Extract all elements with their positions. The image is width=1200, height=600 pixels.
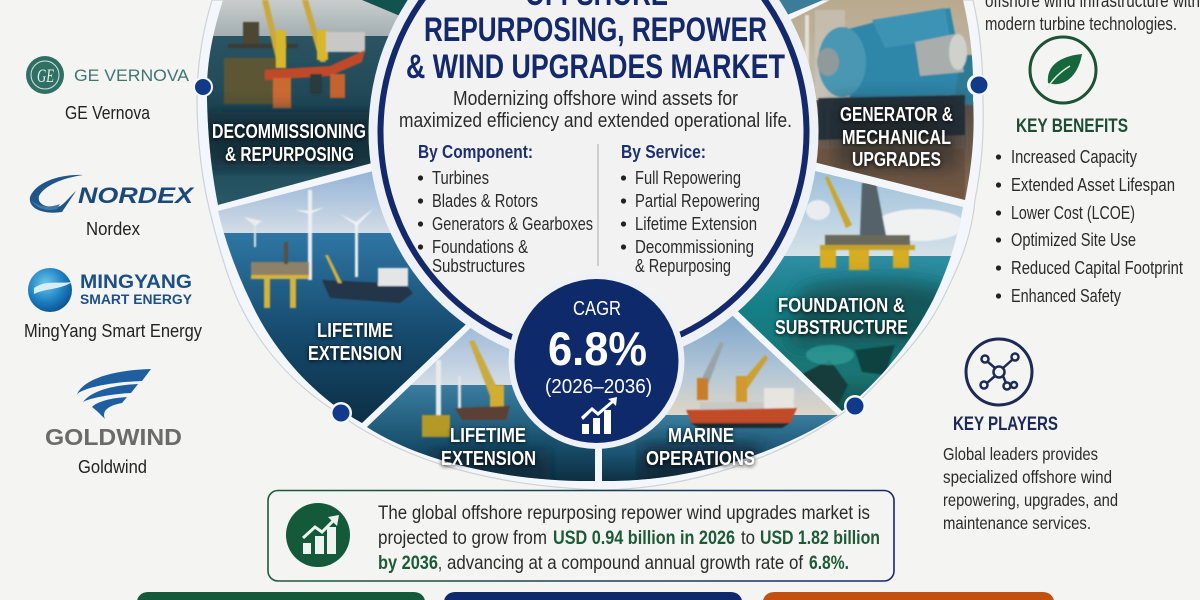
market summary callout: advancing at a compound annual growth rate of [447,552,803,574]
by service list [621,141,760,276]
company: GE Vernova: GE [37,66,54,87]
subtitle: maximized efficiency and extended operational life. [399,110,792,132]
company: Goldwind [45,369,182,477]
market summary callout: by 2036 [378,552,438,574]
segment labels [212,103,953,470]
icon: leaf [1030,37,1096,103]
key benefits: Optimized Site Use [1011,229,1136,250]
key benefits: KEY BENEFITS [1016,115,1128,137]
by component list: Foundations & [432,236,529,257]
icon: network [966,339,1032,405]
wheel connector dots [193,74,989,424]
circular wheel band [197,0,983,490]
subtitle: Modernizing offshore wind assets for [453,88,738,110]
company: Nordex: NORDEX [78,183,195,208]
market summary callout: 6.8%. [809,552,849,574]
market summary callout: to [741,527,755,549]
key benefits: Lower Cost (LCOE) [1011,202,1135,223]
segment labels: OPERATIONS [646,447,755,470]
market summary callout: USD 0.94 billion in 2026 [553,527,735,549]
photo: generator and mechanical upgrades [790,0,974,200]
icon: growth chart [581,397,617,434]
segment labels: MARINE [668,424,734,447]
photo: lifetime extension left [218,171,466,423]
photo: marine operations [602,316,838,481]
by service list: By Service: [621,141,706,162]
segment labels: DECOMMISSIONING [212,120,366,143]
key benefits: Increased Capacity [1011,146,1138,167]
company: MingYang Smart Energy: MingYang Smart Energy [24,320,203,341]
company: Goldwind: Goldwind [78,456,147,477]
segment labels: SUBSTRUCTURE [775,316,908,339]
photo: decommissioning and repurposing [206,0,398,205]
by service list: Lifetime Extension [635,213,757,234]
by service list: Partial Repowering [635,190,760,211]
intro text top right [985,0,1200,34]
by component list [418,141,593,276]
icon: growth chart in green circle [286,503,350,567]
central white disc band [368,0,818,366]
market summary callout [268,490,894,581]
column divider [597,144,599,266]
company: Nordex: Nordex [86,218,141,239]
key players: KEY PLAYERS [953,413,1058,435]
CAGR badge: CAGR [573,298,621,320]
key benefits: Enhanced Safety [1011,285,1122,306]
photo: top left sliver [362,0,440,18]
CAGR badge: 6.8% [548,322,647,375]
title: REPURPOSING, REPOWER [424,11,767,49]
segment labels: & REPURPOSING [225,143,354,166]
by service list: & Repurposing [635,255,731,276]
by component list: Turbines [432,167,489,188]
bottom bar: orange [763,592,1054,600]
segment labels: EXTENSION [441,447,536,470]
title: & WIND UPGRADES MARKET [406,48,785,86]
company: GE Vernova: GE VERNOVA [74,66,190,85]
segment labels: EXTENSION [308,342,402,365]
company: MingYang Smart Energy [24,268,203,341]
subtitle [399,88,792,132]
photo: foundation and substructure [738,171,963,411]
segment labels: FOUNDATION & [778,294,905,317]
bottom bar: green [137,592,425,600]
by component list: Blades & Rotors [432,190,538,211]
key players: Global leaders provides [943,444,1098,464]
market summary callout: USD 1.82 billion [760,527,880,549]
segment labels: LIFETIME [317,319,393,342]
segment labels: UPGRADES [852,148,941,171]
company: MingYang Smart Energy: SMART ENERGY [80,292,192,307]
company: GE Vernova: GE Vernova [65,102,151,123]
market summary callout: projected to grow from [378,527,547,549]
photo: lifetime extension bottom [367,328,595,481]
by component list: Substructures [432,255,525,276]
key players: specialized offshore wind [943,467,1112,487]
market summary callout: The global offshore repurposing repower wind upgrades market is [378,502,870,524]
CAGR badge: (2026–2036) [545,376,652,398]
CAGR badge [508,273,684,449]
key benefits [996,115,1183,306]
company: Nordex [30,175,195,239]
market summary callout: , [438,552,442,574]
segment labels: MECHANICAL [842,126,951,149]
key players: repowering, upgrades, and [943,490,1118,510]
title [406,0,785,86]
company: GE Vernova [26,56,190,123]
key players: maintenance services. [943,513,1091,533]
by service list: Full Repowering [635,167,741,188]
by component list: Generators & Gearboxes [432,213,593,234]
central navy ring [380,0,806,354]
company: Goldwind: GOLDWIND [45,424,182,450]
company: MingYang Smart Energy: MINGYANG [80,272,192,293]
bottom bar: navy [444,592,742,600]
by component list: By Component: [418,141,533,162]
key players [943,413,1118,533]
photo: top right sliver [760,0,823,30]
segment labels: GENERATOR & [840,103,953,126]
by service list: Decommissioning [635,236,754,257]
segment labels: LIFETIME [450,424,526,447]
